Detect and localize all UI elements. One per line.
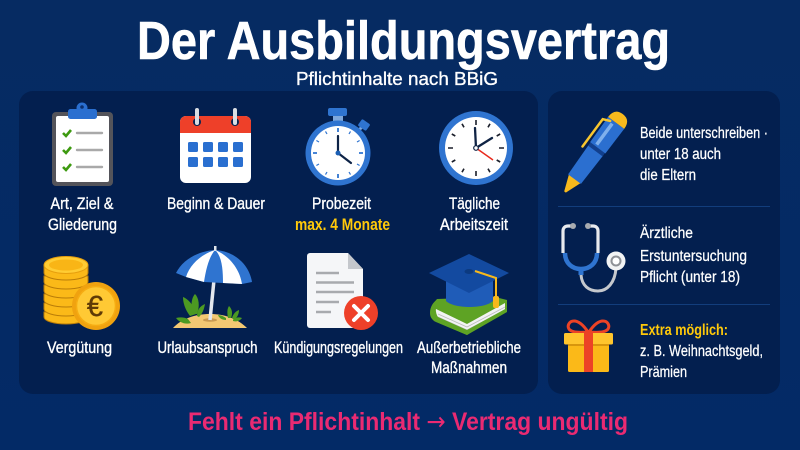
item: Art, Ziel und Gliederung [48, 102, 117, 234]
text: Prämien [640, 364, 687, 381]
text: die Eltern [640, 167, 696, 184]
icon: document with red cross [307, 253, 378, 330]
item: Beginn und Dauer [167, 110, 265, 213]
item: Kündigungsregelungen [274, 253, 403, 357]
icon: stopwatch [306, 108, 370, 186]
text [640, 125, 768, 184]
text [640, 225, 747, 286]
icon: pen [555, 106, 631, 198]
icon: stethoscope [563, 223, 626, 291]
label: Beginn & Dauer [167, 195, 265, 213]
icon: beach umbrella [173, 246, 252, 328]
label: Probezeit [312, 195, 371, 213]
label: Tägliche [449, 195, 500, 213]
label: Kündigungsregelungen [274, 339, 403, 357]
label line 2: Maßnahmen [431, 359, 507, 377]
text [640, 322, 763, 381]
item: Vergütung [44, 256, 120, 357]
text: Extra möglich: [640, 322, 728, 339]
text: Erstuntersuchung [640, 248, 747, 265]
item: Probezeit [295, 108, 390, 234]
icon: coin stack with euro: € [87, 291, 103, 323]
subtitle: Pflichtinhalte nach BBiG [296, 68, 498, 89]
label line 2: Arbeitszeit [440, 216, 508, 234]
icon: wall clock [439, 111, 513, 185]
icon: gift box [564, 321, 613, 372]
icon: calendar [180, 110, 251, 183]
label: Urlaubsanspruch [158, 339, 258, 357]
footer warning: Fehlt ein Pflichtinhalt → Vertrag ungültig [188, 407, 628, 436]
label: Außerbetriebliche [417, 339, 521, 357]
panel: Pflichtinhalte [19, 91, 538, 394]
item: Urlaubsanspruch [158, 246, 258, 357]
title: Der Ausbildungsvertrag [137, 11, 670, 71]
note: Unterschrift [555, 106, 768, 198]
highlight label: max. 4 Monate [295, 216, 390, 234]
icon: graduation cap on book [429, 254, 509, 335]
label: Vergütung [47, 339, 112, 357]
item: Außerbetriebliche Maßnahmen [417, 254, 521, 377]
item: Tägliche Arbeitszeit [439, 111, 513, 234]
text: Ärztliche [640, 225, 693, 242]
text: Pflicht (unter 18) [640, 269, 740, 286]
text: Beide unterschreiben · [640, 125, 768, 142]
panel: Zusatzhinweise [548, 91, 780, 394]
label: Art, Ziel & [50, 195, 114, 213]
note: Extras [564, 321, 763, 381]
label line 2: Gliederung [48, 216, 117, 234]
text: z. B. Weihnachtsgeld, [640, 343, 763, 360]
text: unter 18 auch [640, 146, 721, 163]
icon: clipboard [52, 102, 113, 186]
note: Ärztliche Untersuchung [563, 223, 747, 291]
